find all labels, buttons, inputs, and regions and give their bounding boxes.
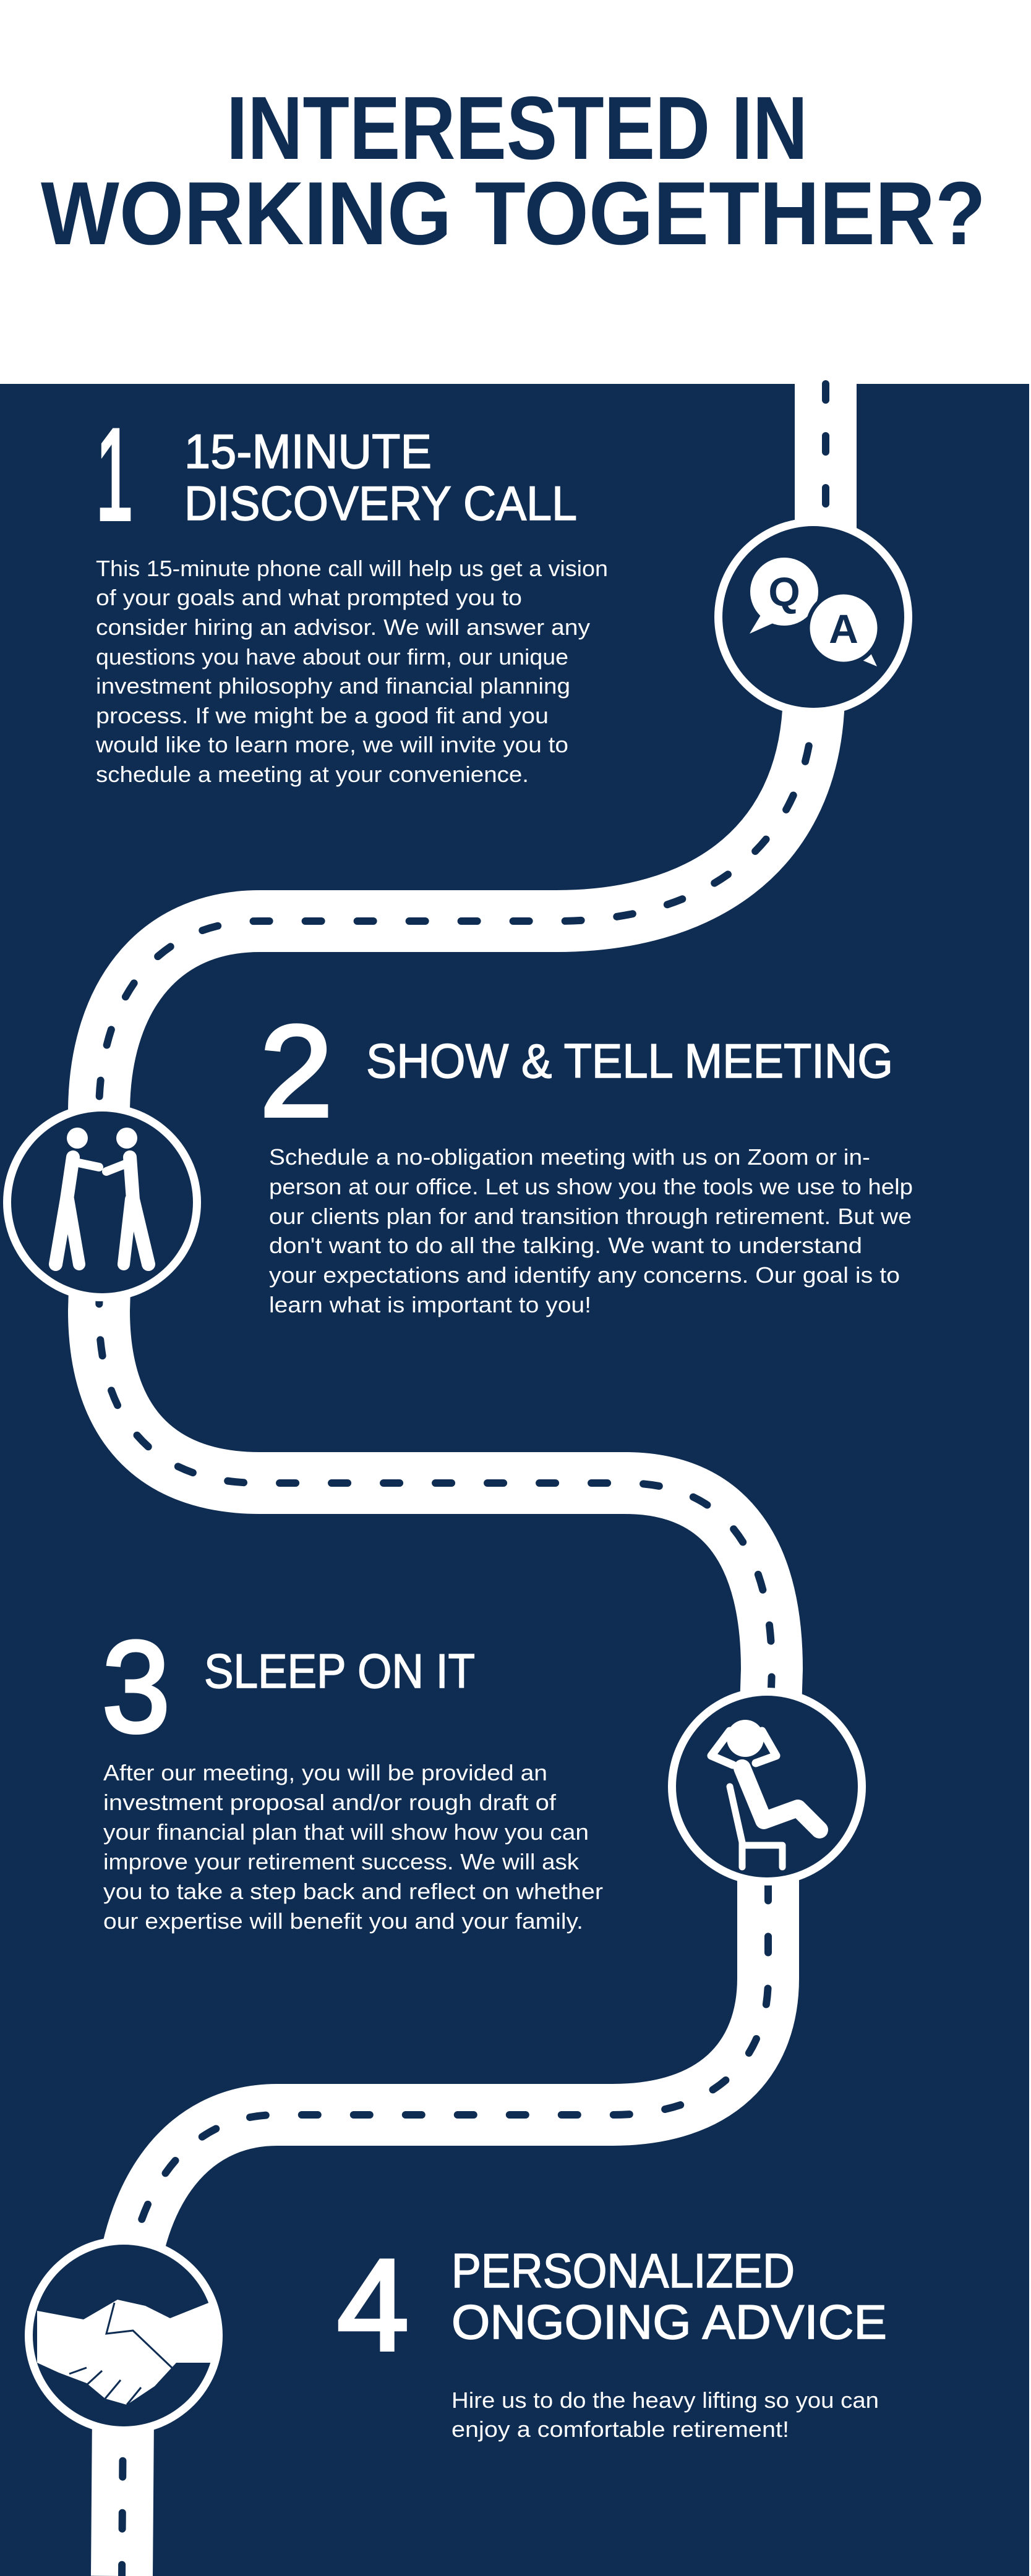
step 4 body: enjoy a comfortable retirement! (451, 2417, 789, 2442)
step 2 body: Schedule a no-obligation meeting with us on Zoom or in- (269, 1144, 870, 1170)
step 3 body: your financial plan that will show how you can (103, 1819, 589, 1845)
step 2 body: your expectations and identify any concerns. Our goal is to (269, 1262, 900, 1288)
step 4 heading: ONGOING ADVICE (451, 2295, 887, 2349)
title: INTERESTED IN (226, 78, 808, 178)
step 2 body: learn what is important to you! (269, 1292, 591, 1317)
icon: Q&A circle: A (829, 606, 858, 652)
step 1 number: 1 (96, 402, 133, 547)
step 3 body: investment proposal and/or rough draft of (103, 1790, 557, 1815)
step 1 body: would like to learn more, we will invite you to (95, 732, 568, 757)
step 1 heading: DISCOVERY CALL (184, 476, 577, 530)
icon: handshake (25, 2237, 223, 2434)
step 1 body: process. If we might be a good fit and you (96, 703, 549, 728)
step 3 body: After our meeting, you will be provided an (103, 1760, 547, 1785)
step 3 body: our expertise will benefit you and your family. (103, 1908, 583, 1934)
step 3 body: improve your retirement success. We will ask (103, 1849, 580, 1874)
title (41, 78, 986, 263)
step 2 body (269, 1144, 913, 1317)
step 2 body: our clients plan for and transition through retirement. But we (269, 1204, 912, 1229)
icon: Q&A circle (714, 518, 912, 716)
step 4 heading (451, 2243, 887, 2349)
icon: relaxing person in chair (668, 1688, 866, 1885)
step 3 heading: SLEEP ON IT (204, 1644, 475, 1698)
step 1 body: of your goals and what prompted you to (96, 585, 522, 610)
step 2 body: don't want to do all the talking. We want to understand (269, 1233, 862, 1258)
step 3 number: 3 (102, 1614, 170, 1759)
road (99, 384, 826, 2576)
step 1 body: This 15-minute phone call will help us get a vision (96, 556, 608, 581)
step 1 body: consider hiring an advisor. We will answer any (96, 614, 590, 640)
step 4 heading: PERSONALIZED (451, 2243, 795, 2298)
icon: Q&A circle: Q (768, 569, 800, 614)
step 1 heading (184, 424, 577, 530)
step 1 body: schedule a meeting at your convenience. (96, 762, 529, 787)
step 1 heading: 15-MINUTE (184, 424, 432, 478)
step 1 body (95, 556, 608, 787)
step 2 body: person at our office. Let us show you the tools we use to help (269, 1174, 913, 1199)
step 3 body: you to take a step back and reflect on whether (103, 1879, 603, 1904)
step 4 number: 4 (337, 2232, 409, 2378)
step 4 body (451, 2387, 879, 2442)
step 1 body: investment philosophy and financial planning (96, 673, 570, 699)
step 4 body: Hire us to do the heavy lifting so you can (451, 2387, 879, 2413)
icon: two people meeting (3, 1103, 201, 1301)
step 1 body: questions you have about our firm, our unique (96, 644, 568, 670)
step 2 heading: SHOW & TELL MEETING (366, 1034, 893, 1088)
step 3 body (103, 1760, 603, 1934)
step 2 number: 2 (260, 998, 333, 1144)
title: WORKING TOGETHER? (41, 163, 986, 263)
